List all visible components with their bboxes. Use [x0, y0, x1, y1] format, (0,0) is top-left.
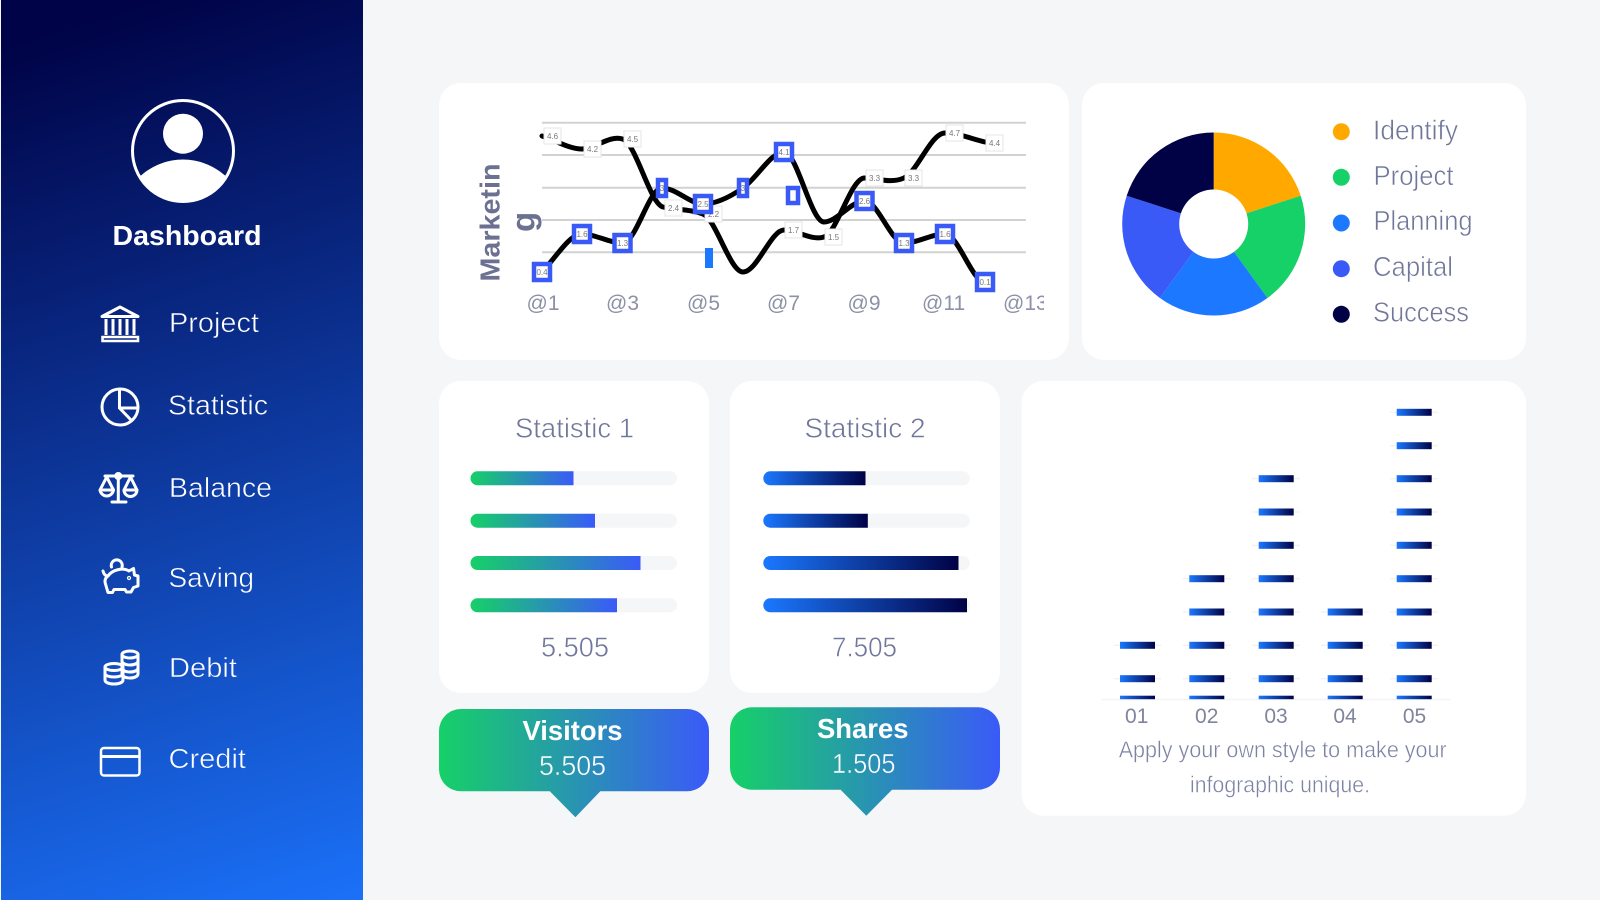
- baseline: [1102, 698, 1450, 700]
- heading: statistic 1: Statistic 1: [515, 412, 634, 444]
- icon: pie statistic: [102, 389, 138, 425]
- icon: user avatar: [132, 100, 234, 202]
- caption: Apply your own style to make your: [1119, 737, 1447, 763]
- data labels: series a: 3.3: [869, 174, 881, 183]
- x axis labels: @5: [687, 292, 720, 315]
- data labels: series a: 4.7: [949, 129, 961, 138]
- bars: statistic 2: [763, 471, 970, 612]
- x axis labels: @7: [767, 292, 800, 315]
- panel: statistic 2: [730, 381, 1000, 693]
- heading: statistic 2: Statistic 2: [804, 412, 926, 444]
- grid lines: [542, 123, 1026, 252]
- bars: statistic 1: [470, 471, 677, 612]
- data labels: series b: 2.5: [697, 200, 709, 209]
- axis title: marketing: Marketin: [474, 164, 506, 282]
- panel: marketing line chart: [439, 83, 1069, 360]
- x axis labels: @3: [606, 292, 639, 315]
- data labels: series b: 2.6: [859, 197, 871, 206]
- data labels: series b: 1.3: [617, 239, 629, 248]
- callout: visitors: [439, 709, 709, 817]
- data labels: series b: 1.6: [939, 230, 951, 239]
- column 01: [1114, 642, 1161, 699]
- column 03: [1252, 475, 1300, 699]
- value: statistic 2: 7.505: [832, 632, 897, 662]
- data labels: series a: 2.2: [708, 210, 720, 219]
- caption: infographic unique.: [1190, 771, 1370, 797]
- data labels: series b: [534, 144, 993, 290]
- x axis labels: 04: [1333, 705, 1357, 728]
- menu label: debit: Debit: [169, 652, 237, 683]
- callout: visitors: 5.505: [539, 750, 606, 781]
- menu label: project: Project: [169, 307, 259, 338]
- data labels: series a: 4.2: [587, 145, 599, 154]
- x axis labels: @9: [848, 292, 880, 315]
- value: statistic 1: 5.505: [541, 632, 609, 662]
- data labels: series a: 3.3: [908, 174, 920, 183]
- data labels: series a: [544, 125, 1003, 245]
- panel: sidebar: [1, 0, 363, 900]
- callout: shares: [730, 707, 1000, 816]
- line series b: [542, 152, 985, 282]
- x axis labels: 05: [1403, 705, 1426, 728]
- menu label: credit: Credit: [168, 743, 246, 774]
- data labels: series a: 4.6: [547, 132, 559, 141]
- icon: coin stacks: [105, 651, 138, 684]
- legend: Success: [1373, 296, 1469, 328]
- x axis labels: [528, 294, 1044, 313]
- x axis labels: @11: [922, 292, 965, 315]
- icon: credit card: [101, 748, 140, 776]
- legend: [1333, 114, 1472, 328]
- data labels: series b: 1.3: [898, 239, 910, 248]
- donut chart: [1122, 132, 1305, 315]
- x axis labels: @1: [526, 292, 560, 315]
- data labels: series a: 1.5: [828, 233, 840, 242]
- data labels: series b: 0.4: [536, 268, 548, 277]
- x axis labels: 02: [1195, 705, 1218, 728]
- line series a: [542, 133, 985, 272]
- callout: visitors: Visitors: [522, 715, 622, 746]
- data labels: series b: 0.1: [979, 278, 991, 287]
- data labels: series b: 3: [660, 184, 665, 193]
- legend: Planning: [1374, 205, 1472, 236]
- data labels: series b: 3: [741, 184, 746, 193]
- legend: Identify: [1373, 114, 1458, 146]
- menu label: statistic: Statistic: [168, 390, 268, 420]
- heading: dashboard: Dashboard: [112, 220, 262, 251]
- blue marker: [705, 248, 713, 268]
- data labels: series a: 1.7: [788, 226, 800, 235]
- panel: segmented bar chart: [1022, 381, 1526, 816]
- icon: balance scale: [100, 474, 137, 502]
- x axis labels: [1125, 705, 1426, 728]
- legend: Capital: [1373, 251, 1453, 282]
- data labels: series a: 4.5: [627, 135, 639, 144]
- panel: donut chart and legend: [1082, 83, 1526, 360]
- x axis labels: @13: [1003, 292, 1048, 315]
- caption: [1119, 737, 1447, 797]
- x axis labels: 01: [1125, 705, 1148, 728]
- icon: bank: [102, 307, 138, 341]
- data labels: series a: 4.4: [989, 139, 1001, 148]
- axis title: marketing: [474, 164, 542, 282]
- x axis labels: 03: [1264, 705, 1288, 728]
- legend: Project: [1374, 160, 1454, 191]
- menu label: saving: Saving: [168, 562, 254, 593]
- callout: shares: 1.505: [832, 748, 896, 779]
- callout: shares: Shares: [817, 713, 908, 744]
- panel: statistic 1: [439, 381, 709, 693]
- column 05: [1390, 409, 1438, 699]
- column 04: [1321, 608, 1369, 699]
- icon: piggy bank: [103, 560, 138, 592]
- data labels: series b: 4.1: [778, 148, 790, 157]
- menu label: balance: Balance: [169, 472, 272, 503]
- data labels: series a: 2.4: [668, 204, 680, 213]
- axis title: marketing: g: [504, 212, 542, 232]
- column 02: [1183, 575, 1231, 699]
- data labels: series b: 1.6: [576, 230, 588, 239]
